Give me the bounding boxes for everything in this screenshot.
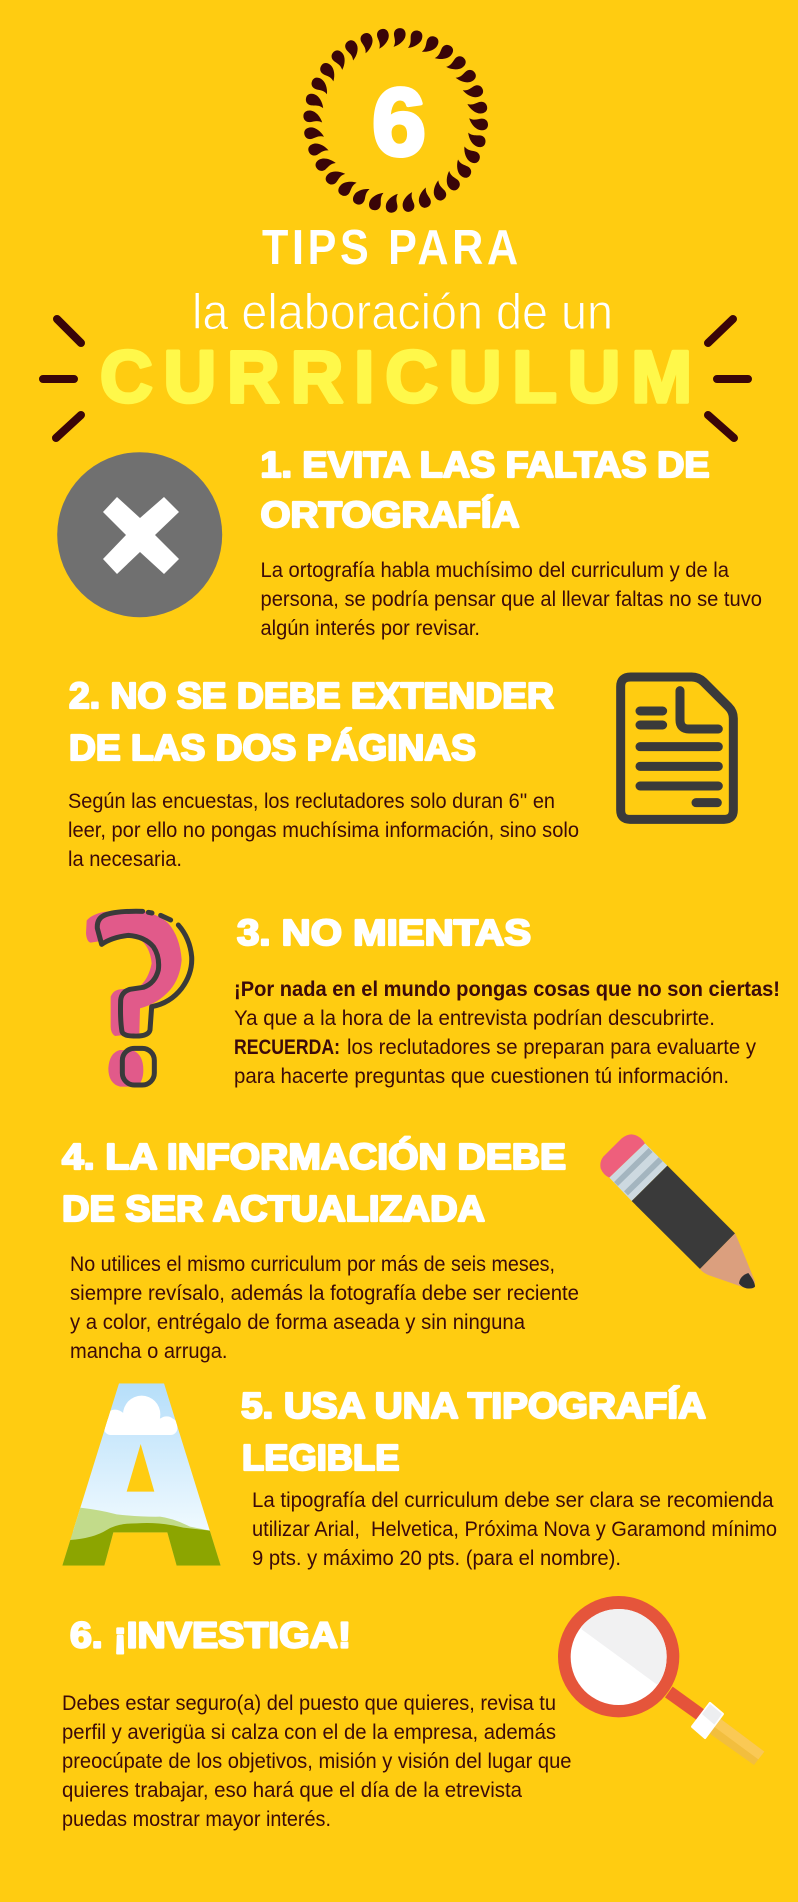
icon: letter A landscape — [60, 1382, 223, 1568]
text 6: preocúpate de los objetivos, misión y visión del lugar que — [62, 1750, 572, 1773]
text 4: mancha o arruga. — [70, 1340, 228, 1363]
text 3: los reclutadores se preparan para evaluarte y — [347, 1036, 756, 1059]
text 6: quieres trabajar, eso hará que el día de la etrevista — [62, 1779, 522, 1802]
text 3: RECUERDA: — [234, 1036, 340, 1059]
text 4: y a color, entrégalo de forma aseada y sin ninguna — [70, 1311, 525, 1334]
icon: question mark — [86, 910, 192, 1087]
tip 2 — [68, 675, 733, 871]
text 1: La ortografía habla muchísimo del curriculum y de la — [260, 559, 729, 582]
rays around title — [43, 319, 748, 438]
tip 3 — [86, 910, 780, 1088]
text 5 — [252, 1489, 777, 1570]
text 3: Ya que a la hora de la entrevista podrían descubrirte. — [234, 1007, 715, 1030]
heading 6: 6. ¡INVESTIGA! — [70, 1615, 351, 1656]
tip 1 — [57, 444, 762, 640]
text 1 — [260, 559, 762, 640]
text 3: ¡Por nada en el mundo pongas cosas que no son ciertas! — [234, 978, 780, 1001]
text 6: puedas mostrar mayor interés. — [62, 1808, 331, 1831]
heading 3: 3. NO MIENTAS — [237, 912, 531, 953]
heading 2: 2. NO SE DEBE EXTENDER — [69, 675, 554, 716]
text 2 — [68, 790, 579, 871]
text 5: utilizar Arial, Helvetica, Próxima Nova y Garamond mínimo — [252, 1518, 777, 1541]
heading 1: ORTOGRAFÍA — [260, 494, 520, 535]
text 4 — [70, 1253, 579, 1363]
heading 1: 1. EVITA LAS FALTAS DE — [260, 444, 710, 485]
icon: pencil — [600, 1134, 755, 1288]
heading 5 — [241, 1385, 706, 1478]
heading 4 — [62, 1135, 566, 1229]
text 5: 9 pts. y máximo 20 pts. (para el nombre). — [252, 1547, 621, 1570]
icon: document — [621, 677, 733, 819]
text 3: para hacerte preguntas que cuestionen tú información. — [234, 1065, 729, 1088]
header — [43, 25, 748, 438]
title: tips para: TIPS PARA — [262, 219, 518, 275]
tip 4 — [62, 1134, 755, 1363]
text 1: algún interés por revisar. — [260, 617, 480, 640]
heading 1 — [260, 444, 710, 535]
heading 2: DE LAS DOS PÁGINAS — [69, 727, 476, 768]
heading 4: DE SER ACTUALIZADA — [62, 1188, 485, 1229]
text 1: persona, se podría pensar que al llevar faltas no se tuvo — [260, 588, 762, 611]
text 5: La tipografía del curriculum debe ser clara se recomienda — [252, 1489, 774, 1512]
number six: 6 — [372, 69, 426, 176]
heading 4: 4. LA INFORMACIÓN DEBE — [62, 1135, 566, 1177]
icon: magnifying glass — [558, 1596, 764, 1765]
text 6: Debes estar seguro(a) del puesto que quieres, revisa tu — [62, 1692, 556, 1715]
tip 6 — [62, 1596, 764, 1831]
heading 5: 5. USA UNA TIPOGRAFÍA — [241, 1385, 706, 1426]
text 2: leer, por ello no pongas muchísima información, sino solo — [68, 819, 579, 842]
icon: ring of drops — [300, 25, 491, 216]
subtitle: la elaboración de un — [192, 284, 613, 340]
text 2: la necesaria. — [68, 848, 182, 871]
title: curriculum: CURRICULUM — [100, 337, 692, 418]
heading 5: LEGIBLE — [242, 1437, 400, 1478]
text 4: No utilices el mismo curriculum por más de seis meses, — [70, 1253, 555, 1276]
text 6: perfil y averigüa si calza con el de la empresa, además — [62, 1721, 556, 1744]
text 4: siempre revísalo, además la fotografía debe ser reciente — [70, 1282, 579, 1305]
text 2: Según las encuestas, los reclutadores solo duran 6'' en — [68, 790, 555, 813]
icon: cross in circle — [57, 452, 222, 617]
text 3 — [234, 978, 780, 1088]
text 6 — [62, 1692, 572, 1831]
heading 2 — [69, 675, 554, 768]
tip 5 — [60, 1382, 777, 1570]
